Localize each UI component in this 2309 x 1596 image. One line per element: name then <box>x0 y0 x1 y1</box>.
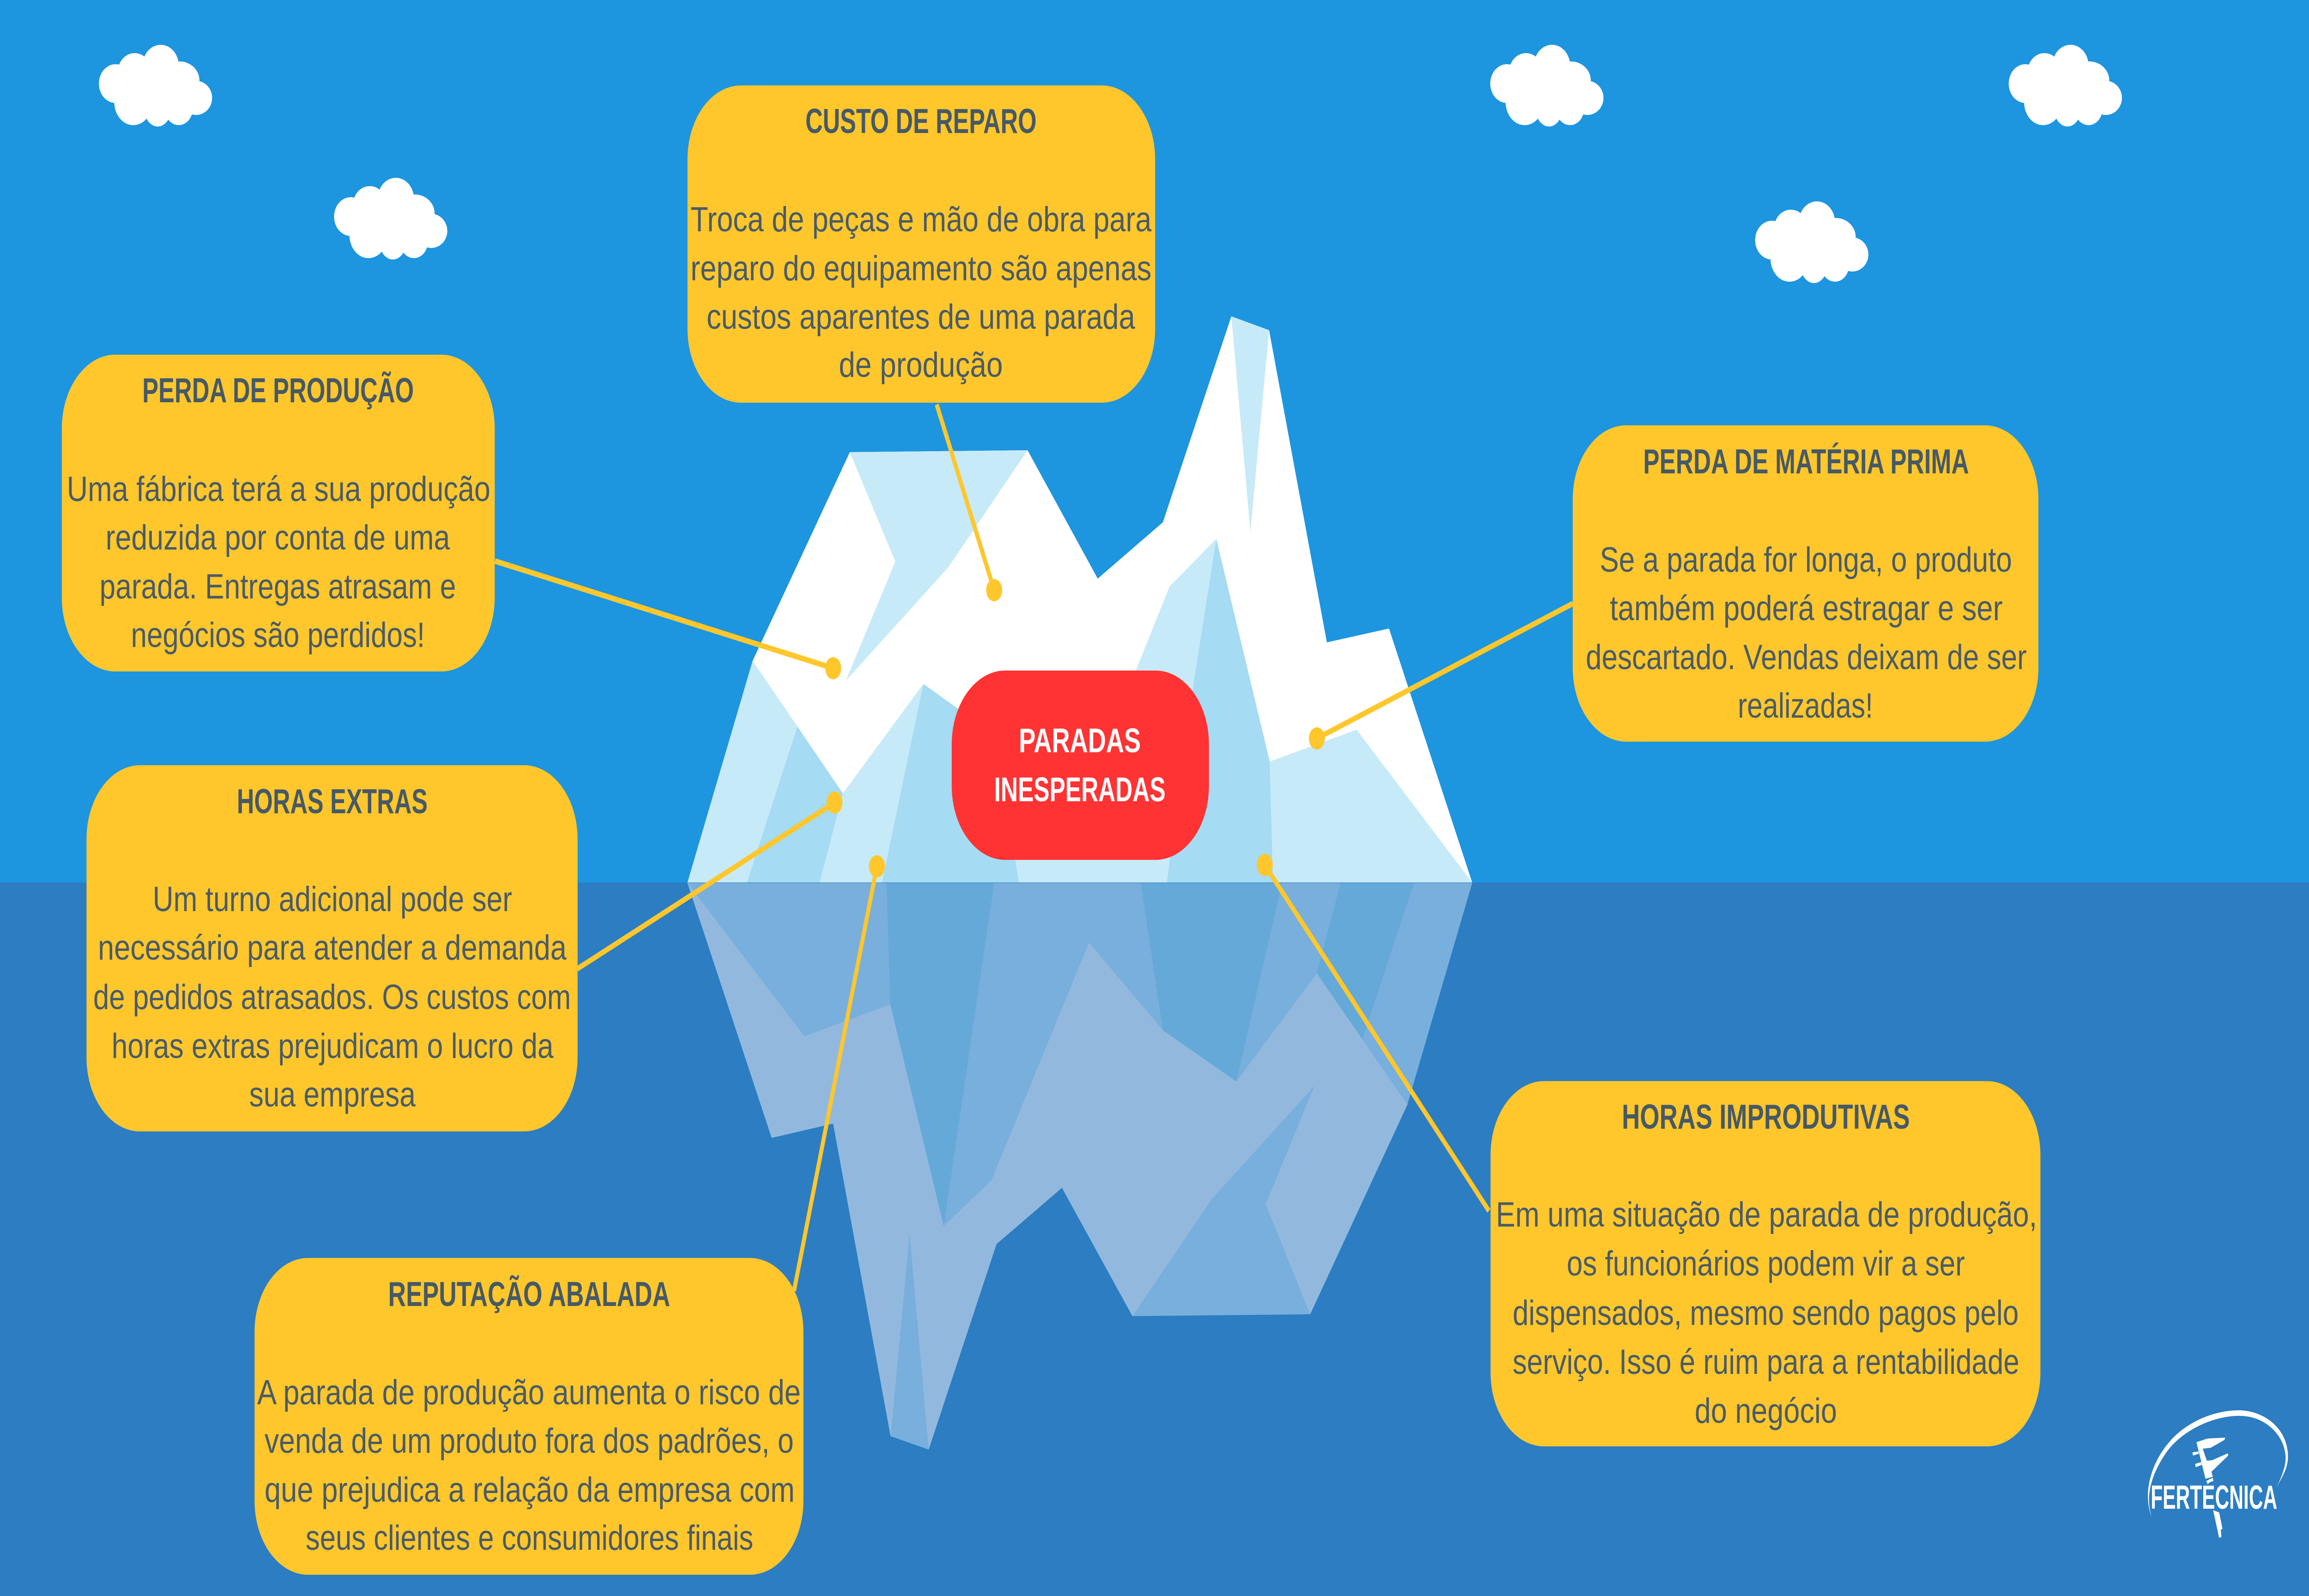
cloud 2 <box>334 178 447 260</box>
panel: horas extras: de pedidos atrasados. Os custos com <box>93 978 571 1017</box>
panel: horas improdutivas: dispensados, mesmo sendo pagos pelo <box>1512 1294 2019 1333</box>
panel: perda de matéria prima: também poderá estragar e ser <box>1610 589 2003 628</box>
panel: horas extras: necessário para atender a demanda <box>98 928 567 967</box>
cloud 3 <box>1490 45 1603 127</box>
panel: perda de produção: PERDA DE PRODUÇÃO <box>142 371 414 410</box>
panel: custo de reparo <box>688 85 1155 403</box>
central label: paradas inesperadas: INESPERADAS <box>994 771 1166 809</box>
panel: reputação abalada: seus clientes e consumidores finais <box>306 1518 753 1558</box>
panel: horas extras: sua empresa <box>249 1075 416 1114</box>
panel: horas extras: HORAS EXTRAS <box>237 782 428 821</box>
connector: perda de matéria prima <box>1309 604 1573 750</box>
connector: perda de produção <box>495 561 841 679</box>
panel: horas improdutivas <box>1491 1081 2040 1446</box>
connector: reputação abalada <box>794 855 885 1291</box>
sea background <box>0 883 2309 1596</box>
sky background <box>0 0 2309 883</box>
panel: horas improdutivas: HORAS IMPRODUTIVAS <box>1622 1097 1910 1136</box>
panel: reputação abalada: A parada de produção aumenta o risco de <box>257 1373 801 1412</box>
panel: horas improdutivas: Em uma situação de parada de produção, <box>1496 1195 2037 1234</box>
connector lines and dots <box>495 405 1573 1291</box>
iceberg below water <box>688 883 1472 1450</box>
panel: horas extras: horas extras prejudicam o lucro da <box>112 1027 554 1066</box>
panel: perda de produção <box>62 355 495 671</box>
clouds <box>99 45 2122 283</box>
panel: perda de produção: parada. Entregas atrasam e <box>100 567 456 606</box>
panel: horas improdutivas: do negócio <box>1695 1391 1837 1431</box>
panel: custo de reparo: reparo do equipamento são apenas <box>690 249 1151 288</box>
panel: perda de produção: reduzida por conta de uma <box>106 518 450 557</box>
panel: reputação abalada: venda de um produto fora dos padrões, o <box>265 1421 794 1461</box>
connector: horas extras <box>577 792 842 969</box>
panel: perda de produção: Uma fábrica terá a sua produção <box>67 470 490 509</box>
central label: paradas inesperadas: PARADAS <box>1019 722 1141 760</box>
panel: perda de matéria prima <box>1573 425 2038 742</box>
panel: custo de reparo: de produção <box>839 345 1003 385</box>
panel: reputação abalada: REPUTAÇÃO ABALADA <box>388 1275 670 1313</box>
connector: horas improdutivas <box>1257 854 1489 1211</box>
connector: custo de reparo <box>937 405 1002 601</box>
panel: perda de produção: negócios são perdidos! <box>131 616 425 655</box>
panel: custo de reparo: Troca de peças e mão de obra para <box>690 200 1152 239</box>
panel: horas improdutivas: serviço. Isso é ruim para a rentabilidade <box>1512 1342 2019 1382</box>
cloud 1 <box>99 45 212 127</box>
panel: custo de reparo: CUSTO DE REPARO <box>805 102 1037 140</box>
panel: horas extras: Um turno adicional pode ser <box>153 880 512 919</box>
panel: reputação abalada: que prejudica a relação da empresa com <box>265 1470 795 1510</box>
cloud 5 <box>1755 201 1868 283</box>
panel: reputação abalada <box>254 1258 804 1575</box>
logo: Fertécnica <box>2148 1410 2288 1538</box>
cloud 4 <box>2009 45 2122 127</box>
panel: horas improdutivas: os funcionários podem vir a ser <box>1567 1244 1965 1283</box>
logo: Fertécnica: FERTÉCNICA <box>2151 1479 2277 1516</box>
iceberg above water <box>688 316 1472 883</box>
panel: perda de matéria prima: descartado. Vendas deixam de ser <box>1586 638 2027 677</box>
panel: perda de matéria prima: Se a parada for longa, o produto <box>1600 540 2012 580</box>
panel: perda de matéria prima: PERDA DE MATÉRIA PRIMA <box>1643 442 1969 481</box>
panel: custo de reparo: custos aparentes de uma parada <box>707 297 1135 337</box>
panel: horas extras <box>86 765 578 1131</box>
panel: perda de matéria prima: realizadas! <box>1738 686 1873 725</box>
central label: paradas inesperadas <box>952 671 1209 860</box>
